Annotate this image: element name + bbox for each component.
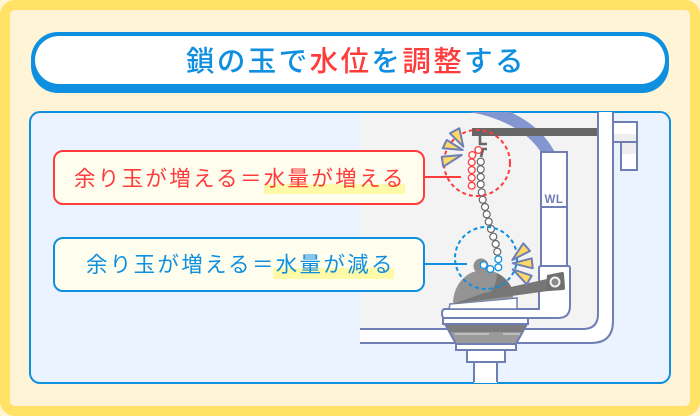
red callout: [54, 151, 424, 204]
red dashed circle: [444, 130, 510, 196]
base fitting: [442, 266, 570, 318]
title text: 鎖の玉で水位を調整する: [186, 46, 526, 78]
stem: [474, 362, 497, 383]
blue spare beads: [480, 256, 502, 272]
stem collar: [467, 350, 505, 362]
blue callout text: 余り玉が増える＝水量が減る: [86, 253, 395, 277]
tank interior: [360, 113, 598, 329]
red callout text: 余り玉が増える＝水量が増える: [74, 167, 406, 191]
red spare beads: [468, 147, 482, 189]
tank diagram: [360, 106, 637, 383]
blue callout: [54, 238, 424, 291]
flapper ball: [453, 258, 513, 304]
tank wall: [360, 112, 613, 343]
title banner: [31, 32, 669, 93]
chain beads: [477, 158, 501, 255]
overflow tube: [541, 152, 567, 268]
lower ring: [456, 344, 516, 350]
flapper base: [449, 298, 517, 309]
valve seat: [445, 324, 527, 344]
outer bracket: [613, 122, 637, 170]
flapper arm: [453, 272, 565, 304]
main panel: [30, 112, 670, 383]
icon: lower emphasis marks: [512, 243, 533, 284]
red callout connector: [424, 176, 461, 178]
lever bar: [472, 128, 597, 136]
seat rim: [443, 318, 528, 324]
blue callout connector: [424, 263, 467, 265]
icon: upper emphasis marks: [442, 128, 463, 167]
chain hook: [480, 136, 487, 157]
blue dashed circle: [455, 227, 517, 289]
WL label: WL: [544, 194, 564, 206]
refill arc pipe: [470, 112, 554, 151]
